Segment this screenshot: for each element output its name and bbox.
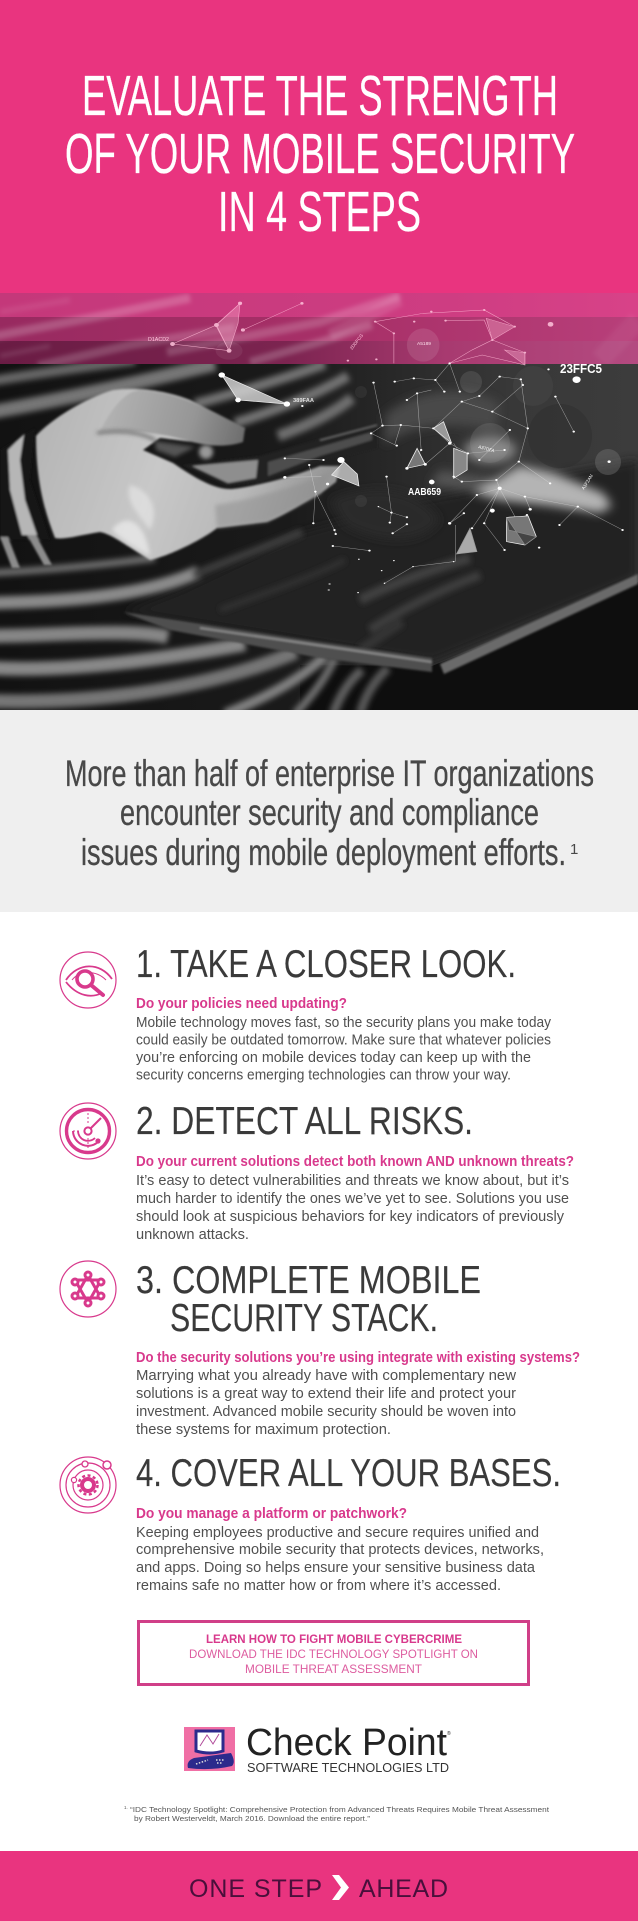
tablet edge — [123, 574, 638, 674]
index finger — [100, 390, 245, 446]
call to action box — [138, 1622, 528, 1684]
network labels: AAB659 — [408, 486, 441, 498]
question: Do your policies need updating? — [136, 996, 347, 1012]
Check Point logo: SOFTWARE TECHNOLOGIES LTD — [247, 1761, 449, 1775]
tablet surface — [123, 460, 638, 662]
pink colour bands over the photo — [0, 293, 638, 366]
question: Do your current solutions detect both known AND unknown threats? — [136, 1154, 574, 1170]
body text: security concerns emerging technologies can throw your way. — [136, 1068, 511, 1084]
tagline: ONE STEP — [189, 1875, 322, 1903]
hero photo: hand holding phone over tablet — [0, 364, 638, 710]
far hand and glow — [330, 391, 612, 539]
area under tablet — [300, 582, 638, 710]
call to action box: DOWNLOAD THE IDC TECHNOLOGY SPOTLIGHT ON — [189, 1647, 478, 1661]
title — [65, 64, 575, 244]
body text: Mobile technology moves fast, so the security plans you make today — [136, 1015, 552, 1031]
body text: these systems for maximum protection. — [136, 1422, 391, 1438]
network labels: A5189 — [417, 341, 432, 346]
white nodes — [219, 362, 624, 593]
logo icon: computer — [184, 1727, 235, 1771]
body text: comprehensive mobile security that protects devices, networks, — [136, 1542, 544, 1558]
cuff stripes — [0, 428, 52, 568]
white network lines — [285, 363, 623, 583]
step 2 — [60, 1100, 574, 1243]
step 1 — [60, 943, 552, 1084]
network labels: A1F2AN — [581, 473, 594, 491]
heading: 2. DETECT ALL RISKS. — [136, 1100, 473, 1143]
body text — [136, 1525, 544, 1594]
network labels: D1ACD2 — [148, 337, 169, 343]
footer band: AHEAD — [359, 1875, 448, 1903]
intro statement — [65, 753, 594, 873]
body text: much harder to identify the ones we’ve yet to see. Solutions you use — [136, 1191, 569, 1207]
icon: radar — [60, 1103, 116, 1159]
step 3 — [60, 1259, 580, 1438]
icon: eye with magnifier — [60, 952, 116, 1008]
body text: could easily be outdated tomorrow. Make sure that whatever policies — [136, 1032, 551, 1048]
heading: SECURITY STACK. — [170, 1297, 438, 1340]
body text: Keeping employees productive and secure requires unified and — [136, 1525, 539, 1541]
footnote: 1. — [124, 1805, 128, 1810]
footer band — [0, 1851, 638, 1921]
footnote — [124, 1805, 550, 1823]
body text: unknown attacks. — [136, 1227, 249, 1243]
call to action box: MOBILE THREAT ASSESSMENT — [245, 1662, 423, 1676]
network labels: 2DDFCG — [349, 333, 364, 351]
title banner — [0, 0, 638, 293]
light streaks in band — [0, 296, 638, 366]
body text: and apps. Doing so helps ensure your sensitive business data — [136, 1560, 536, 1576]
call to action box: LEARN HOW TO FIGHT MOBILE CYBERCRIME — [206, 1632, 462, 1646]
phone — [183, 424, 377, 486]
body text — [136, 1368, 517, 1438]
question: Do the security solutions you’re using integrate with existing systems? — [136, 1350, 580, 1366]
intro panel — [0, 710, 638, 912]
body text: should look at suspicious behaviors for key indicators of previously — [136, 1209, 565, 1225]
hand — [36, 389, 340, 560]
pink network in band — [170, 302, 553, 365]
heading: 3. COMPLETE MOBILE — [136, 1259, 481, 1302]
network labels: 23FFC5 — [560, 362, 602, 376]
footnote: by Robert Westerveldt, March 2016. Download the entire report.” — [134, 1814, 371, 1823]
body text — [136, 1173, 569, 1243]
step 4 — [60, 1452, 561, 1594]
footnote: “IDC Technology Spotlight: Comprehensive Protection from Advanced Threats Requires Mobile Threat Assessment — [130, 1805, 550, 1814]
title: IN 4 STEPS — [218, 180, 421, 244]
heading: 1. TAKE A CLOSER LOOK. — [136, 943, 516, 986]
body text: remains safe no matter how or from where it’s accessed. — [136, 1578, 501, 1594]
body text — [136, 1015, 552, 1084]
body text: Marrying what you already have with complementary new — [136, 1368, 517, 1384]
Check Point logo: Check Point — [246, 1722, 447, 1764]
triangles — [222, 375, 536, 554]
question: Do you manage a platform or patchwork? — [136, 1506, 407, 1522]
body text: investment. Advanced mobile security should be woven into — [136, 1404, 516, 1420]
icon: linked hexagon nodes — [60, 1261, 116, 1317]
Check Point logo — [184, 1722, 451, 1775]
icon: chevron — [332, 1875, 349, 1900]
network labels: 389FAA — [293, 398, 314, 404]
sleeve stripes — [0, 360, 480, 714]
data network graphic — [170, 302, 624, 593]
body text: solutions is a great way to extend their life and protect your — [136, 1386, 516, 1402]
body text: you’re enforcing on mobile devices today can keep up with the — [136, 1050, 531, 1066]
network labels: A37DFA — [478, 444, 495, 453]
lens circles — [355, 366, 621, 507]
body text: It’s easy to detect vulnerabilities and threats we know about, but it’s — [136, 1173, 569, 1189]
Check Point logo: ® — [447, 1730, 451, 1737]
heading — [136, 1259, 481, 1340]
intro statement: 1 — [570, 841, 578, 858]
icon: orbiting gears — [60, 1457, 116, 1513]
network labels — [148, 333, 602, 498]
